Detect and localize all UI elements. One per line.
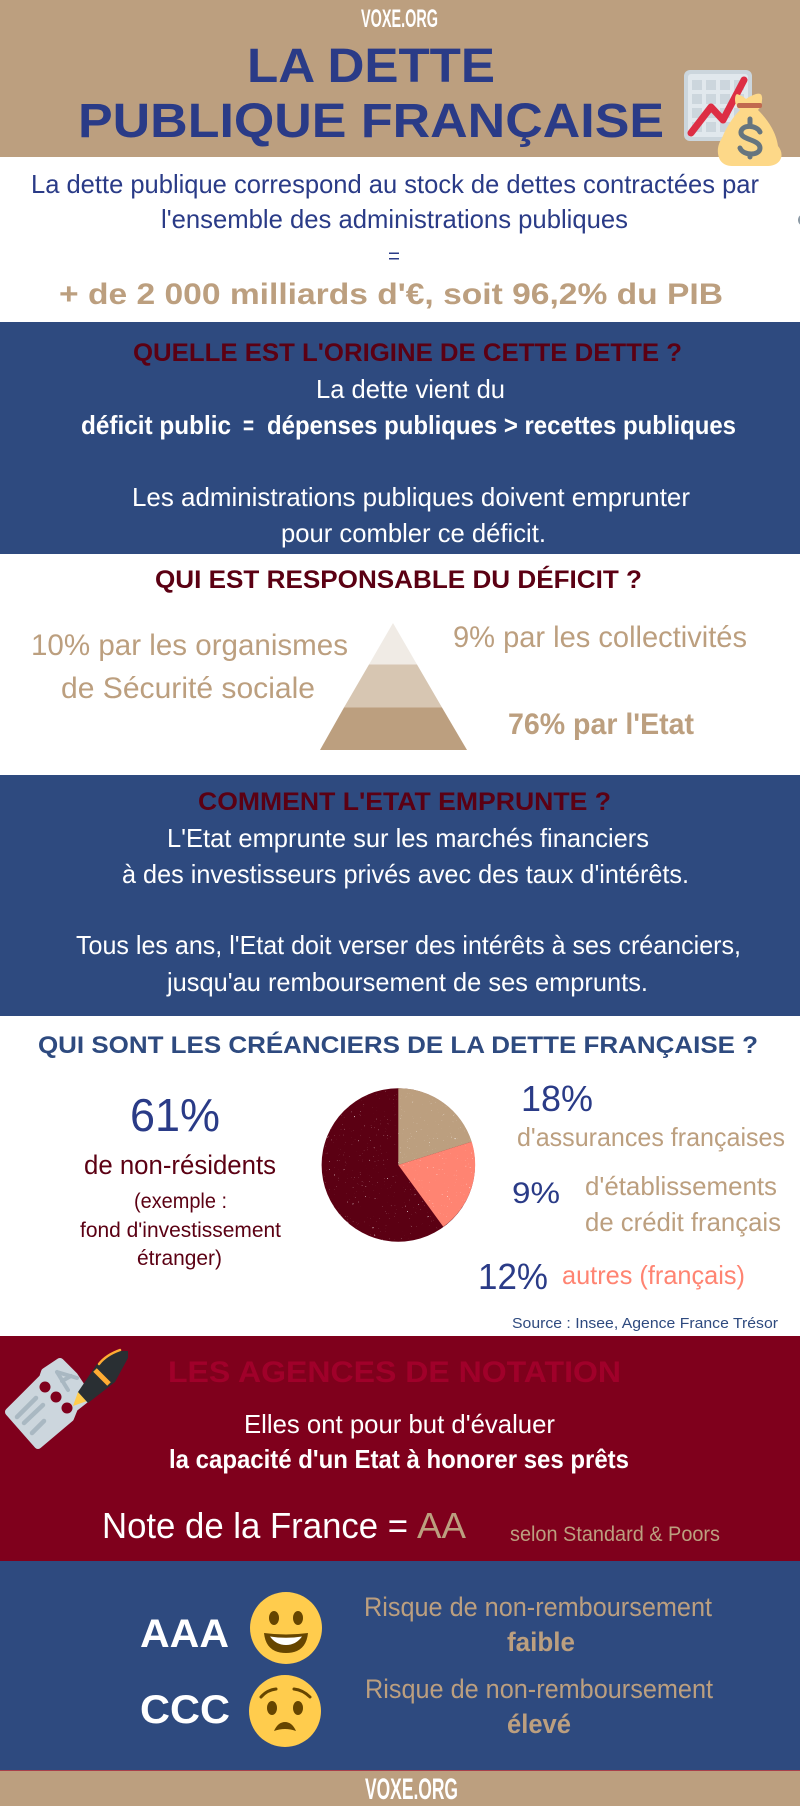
title: LA DETTE [247,40,495,93]
stat: 61%: 61% [130,1089,220,1141]
stat: 61%: de non-résidents [84,1150,276,1180]
panel: échelle de notation [0,1561,800,1770]
body text: la capacité d'un Etat à honorer ses prêts [169,1444,629,1474]
text: low risk: faible [507,1627,575,1657]
body text: La dette vient du [316,374,505,404]
body text: pour combler ce déficit. [281,518,546,548]
brand: voxe.org: VOXE.ORG [365,1773,458,1806]
rating: ccc [140,1674,713,1747]
rating: ccc: CCC [140,1688,230,1732]
intro text [31,169,759,268]
text: high risk: Risque de non-remboursement [365,1674,713,1704]
body text: déficit public [81,410,231,440]
panel: responsables du déficit [0,554,800,775]
heading: COMMENT L'ETAT EMPRUNTE ? [198,788,611,816]
stat: 61%: (exemple : [134,1190,227,1213]
heading: QUI SONT LES CRÉANCIERS DE LA DETTE FRANÇAISE ? [38,1031,758,1059]
pyramid chart [320,623,467,750]
panel: intro [0,157,800,322]
stat: 12%: 12% [478,1256,548,1297]
stat: 9%: d'établissements [585,1171,777,1201]
text: high risk [365,1674,713,1739]
rating of france: selon Standard & Poors [510,1523,720,1546]
stat: 9% [512,1171,781,1237]
panel: footer [0,1770,800,1806]
intro text: = [388,245,400,268]
rating of france: Note de la France = [102,1505,408,1546]
label: 76%: 76% par l'Etat [508,708,694,741]
body text: jusqu'au remboursement de ses emprunts. [166,967,648,997]
intro text: l'ensemble des administrations publiques [161,204,628,234]
panel: comment l'état emprunte [0,775,800,1016]
heading: QUI EST RESPONSABLE DU DÉFICIT ? [155,565,642,594]
rating of france: AA [417,1505,466,1546]
rating: aaa [140,1592,712,1664]
icon: ballot and pen [9,1350,128,1445]
body text: = [243,410,254,440]
pie chart [320,1087,477,1244]
text: low risk: Risque de non-remboursement [364,1592,712,1622]
body text: Elles ont pour but d'évaluer [244,1409,555,1439]
heading: LES AGENCES DE NOTATION [168,1356,621,1389]
heading: QUELLE EST L'ORIGINE DE CETTE DETTE ? [133,339,682,367]
stat: 12%: autres (français) [562,1260,745,1290]
title: PUBLIQUE FRANÇAISE [78,95,664,148]
icon: worried face [249,1675,321,1747]
body text: L'Etat emprunte sur les marchés financiers [167,823,649,853]
rating: aaa: AAA [140,1612,229,1656]
stat: 61%: fond d'investissement [80,1219,281,1242]
label: 10% [31,629,348,705]
body text [76,823,741,997]
icon: chart and money bag [684,70,782,166]
brand: voxe.org: VOXE.ORG [361,5,438,33]
body text: dépenses publiques > recettes publiques [267,410,736,440]
icon: smiling face [250,1592,322,1664]
stat: 61%: étranger) [137,1247,222,1270]
key figure: + de 2 000 milliards d'€, soit 96,2% du PIB [59,278,723,311]
body text: à des investisseurs privés avec des taux d'intérêts. [122,859,689,889]
label: 10%: 10% par les organismes [31,629,348,662]
title [78,40,664,148]
body text [81,374,736,548]
panel: créanciers [39,1032,784,1331]
stat: 61% [80,1089,281,1270]
panel: header [0,0,800,157]
label: 10%: de Sécurité sociale [61,672,315,705]
body text: Les administrations publiques doivent emprunter [132,482,690,512]
panel: origine de la dette [0,322,800,554]
body text: Tous les ans, l'Etat doit verser des intérêts à ses créanciers, [76,930,741,960]
stat: 18%: d'assurances françaises [517,1122,785,1152]
body text [169,1409,629,1474]
source: Source : Insee, Agence France Trésor [512,1315,778,1332]
stat: 9%: 9% [512,1177,560,1210]
stat: 9%: de crédit français [585,1207,781,1237]
panel: agences de notation [0,1336,800,1561]
text: low risk [364,1592,712,1657]
text: high risk: élevé [507,1709,571,1739]
stat: 18% [517,1078,785,1152]
stat: 12% [478,1256,745,1297]
stat: 18%: 18% [521,1078,593,1119]
rating of france [102,1505,720,1546]
label: 9%: 9% par les collectivités [453,621,747,654]
intro text: La dette publique correspond au stock de dettes contractées par [31,169,759,199]
